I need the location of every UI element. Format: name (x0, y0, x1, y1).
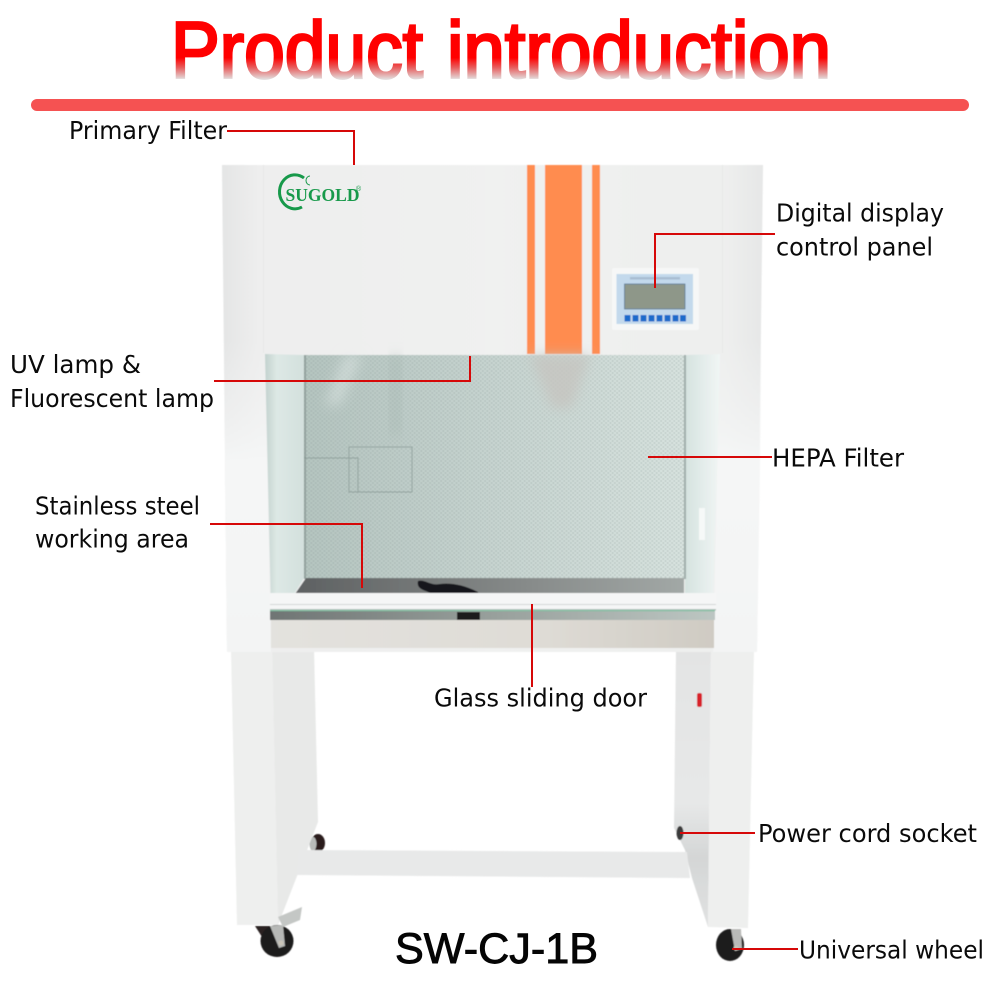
stainless front plate (271, 620, 714, 648)
back-left wheel (310, 834, 325, 852)
digital display control panel (612, 268, 699, 330)
orange stripes (527, 165, 600, 354)
logo: SUGOLD: SUGOLD (286, 185, 360, 205)
logo: SUGOLD (279, 175, 362, 209)
cabinet body (222, 165, 763, 652)
left wheel with brake (255, 907, 302, 957)
product: laminar flow cabinet (222, 165, 763, 961)
label: UV lamp and Fluorescent lamp: UV lamp & (10, 350, 141, 379)
title: introduction (447, 6, 831, 94)
label: HEPA Filter: HEPA Filter (772, 444, 905, 472)
label: UV lamp and Fluorescent lamp: Fluorescent lamp (10, 384, 214, 413)
right wall light strip (699, 508, 705, 540)
crossbar (297, 850, 690, 878)
leader lines (210, 131, 798, 949)
label: Primary Filter: Primary Filter (69, 116, 228, 145)
label: Universal wheel: Universal wheel (799, 936, 984, 964)
work chamber opening (265, 354, 720, 648)
left leg (231, 648, 318, 925)
label: Glass sliding door: Glass sliding door (434, 684, 648, 712)
title: Product (171, 6, 423, 94)
logo: SUGOLD: ® (356, 185, 362, 193)
HEPA filter perforated panel (304, 355, 686, 579)
label: Power cord socket: Power cord socket (758, 819, 977, 848)
label: Digital display control panel: Digital display (776, 198, 944, 228)
label: Digital display control panel: control panel (776, 232, 933, 262)
control buttons (624, 315, 686, 322)
title divider bar (31, 99, 969, 111)
object on tray (418, 581, 478, 594)
red rocker switch (697, 693, 702, 707)
right leg (674, 650, 754, 928)
power socket (676, 826, 684, 840)
right wheel (716, 929, 744, 961)
label: Stainless steel working area: working area (35, 524, 189, 554)
model number: SW-CJ-1B (395, 925, 598, 973)
glass sliding door (270, 593, 716, 620)
stainless work tray (295, 578, 684, 594)
label: Stainless steel working area: Stainless steel (35, 492, 200, 520)
